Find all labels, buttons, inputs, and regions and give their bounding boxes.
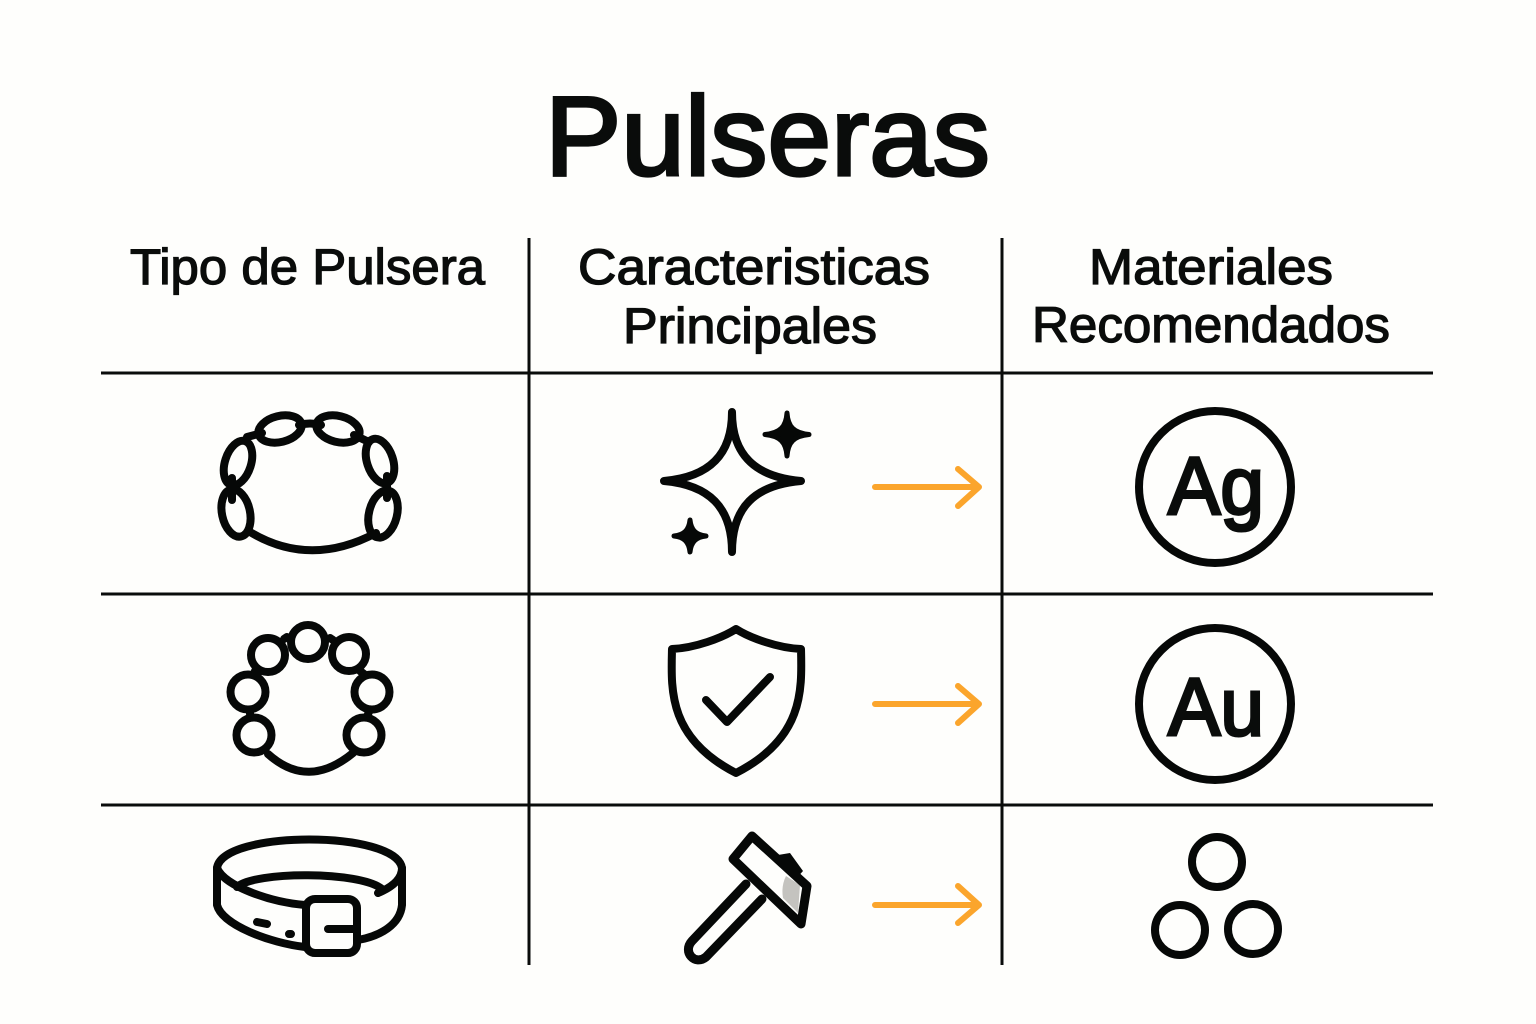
icon: chain bracelet	[217, 411, 402, 550]
icon: hammer	[688, 836, 807, 960]
column heading: materiales recomendados: Recomendados	[1032, 297, 1390, 353]
column heading: caracteristicas principales: Principales	[623, 298, 877, 354]
column heading: materiales recomendados	[1032, 239, 1390, 353]
icon: shield with check	[672, 629, 801, 773]
icon: leather belt	[217, 840, 402, 953]
column heading: materiales recomendados: Materiales	[1089, 239, 1333, 295]
arrow: row 2	[875, 686, 979, 723]
material: gold: Au	[1168, 662, 1264, 753]
material: silver	[1139, 411, 1291, 563]
arrow: row 3	[875, 886, 979, 923]
column heading: caracteristicas principales: Caracteristicas	[578, 239, 930, 295]
title: Pulseras	[545, 74, 990, 199]
column heading: tipo de pulsera: Tipo de Pulsera	[130, 239, 485, 295]
arrow: row 1	[875, 469, 979, 506]
material: gold	[1139, 628, 1291, 780]
icon: beaded bracelet	[230, 625, 390, 772]
icon: sparkles	[664, 412, 809, 552]
table grid	[101, 238, 1433, 965]
column heading: caracteristicas principales	[578, 239, 930, 354]
material: silver: Ag	[1168, 441, 1264, 532]
material: three circles	[1155, 837, 1278, 955]
